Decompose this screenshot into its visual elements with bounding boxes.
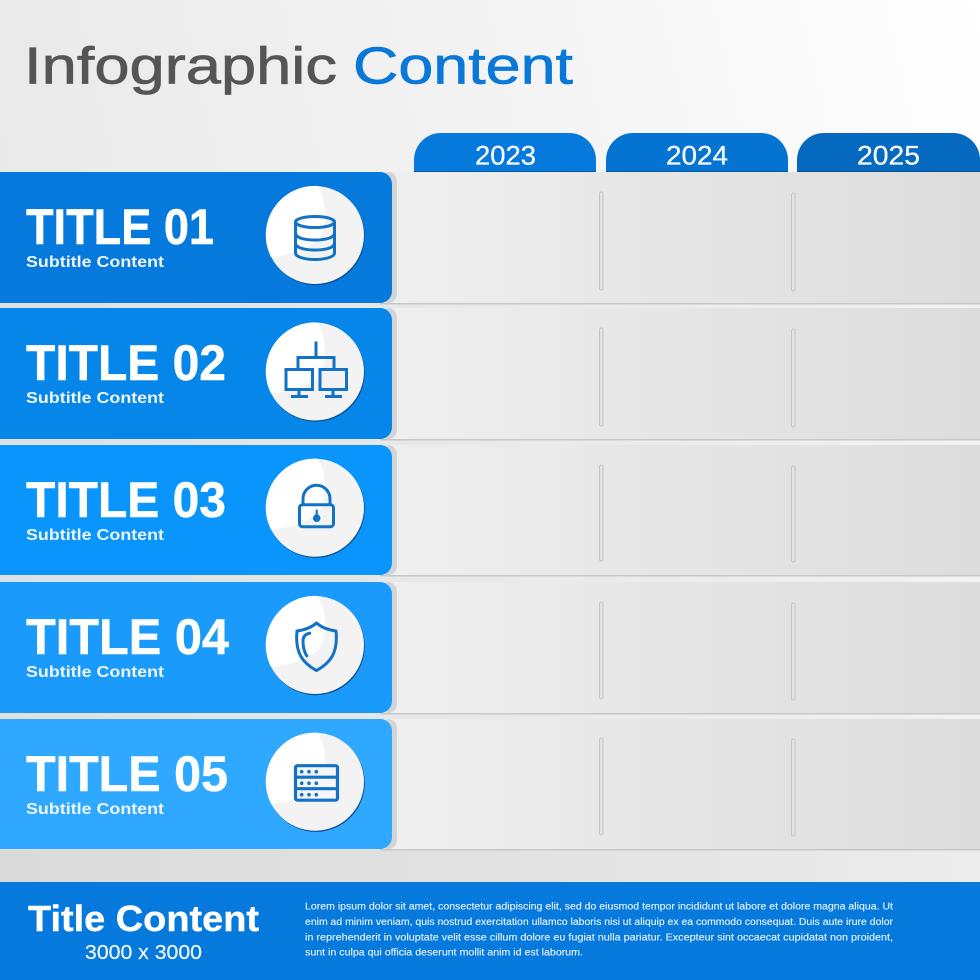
row 4 [0,582,980,714]
row 2 heading: TITLE 02 [26,335,226,391]
row 2 content area [380,308,980,440]
title: Content [353,38,574,96]
row 1 subtitle: Subtitle Content [26,254,165,271]
footer band [0,882,980,980]
row 1 [0,172,980,304]
year header: 2025: 2025 [857,140,920,170]
row 5 [0,719,980,850]
year header: 2024: 2024 [666,140,728,170]
icon: database [266,186,365,285]
icon: padlock [266,459,365,558]
row 2 subtitle: Subtitle Content [26,390,165,407]
year header: 2023: 2023 [475,140,536,170]
row 3 panel [0,445,397,575]
footer paragraph: in reprehenderit in voluptate velit esse cillum dolore eu fugiat nulla pariatur. Excepteur sint occaecat cupidatat non proident, [305,932,893,944]
footer dimensions: 3000 x 3000 [85,942,202,964]
title: Infographic [24,38,337,96]
row 2 [0,308,980,440]
icon: shield [266,596,365,695]
row 5 heading: TITLE 05 [26,746,228,802]
row 2 panel [0,308,397,439]
footer paragraph [305,902,894,958]
row 5 panel [0,719,397,849]
row 3 subtitle: Subtitle Content [26,527,165,544]
footer paragraph: enim ad minim veniam, quis nostrud exercitation ullamco laboris nisi ut aliquip ex ea commodo consequat. Duis aute irure dolor [305,917,894,928]
year header: 2024 [606,133,788,172]
row 3 [0,445,980,576]
row 1 panel [0,172,397,303]
year header: 2025 [797,133,980,172]
row 3 content area [380,445,980,576]
row 4 heading: TITLE 04 [26,609,229,665]
icon: server rack [266,733,365,832]
row 5 subtitle: Subtitle Content [26,801,165,818]
footer paragraph: Lorem ipsum dolor sit amet, consectetur adipiscing elit, sed do eiusmod tempor incididunt ut labore et dolore magna aliqua. Ut [305,902,893,912]
footer paragraph: sunt in culpa qui officia deserunt mollit anim id est laborum. [305,948,583,958]
row 1 content area [380,172,980,304]
row 4 content area [380,582,980,714]
row 4 panel [0,582,397,713]
icon: network [266,322,365,422]
footer title: Title Content [28,898,259,939]
row 4 subtitle: Subtitle Content [26,664,165,681]
year header: 2023 [414,133,596,172]
row 3 heading: TITLE 03 [26,472,226,528]
row 1 heading: TITLE 01 [26,199,214,255]
row 5 content area [380,719,980,850]
